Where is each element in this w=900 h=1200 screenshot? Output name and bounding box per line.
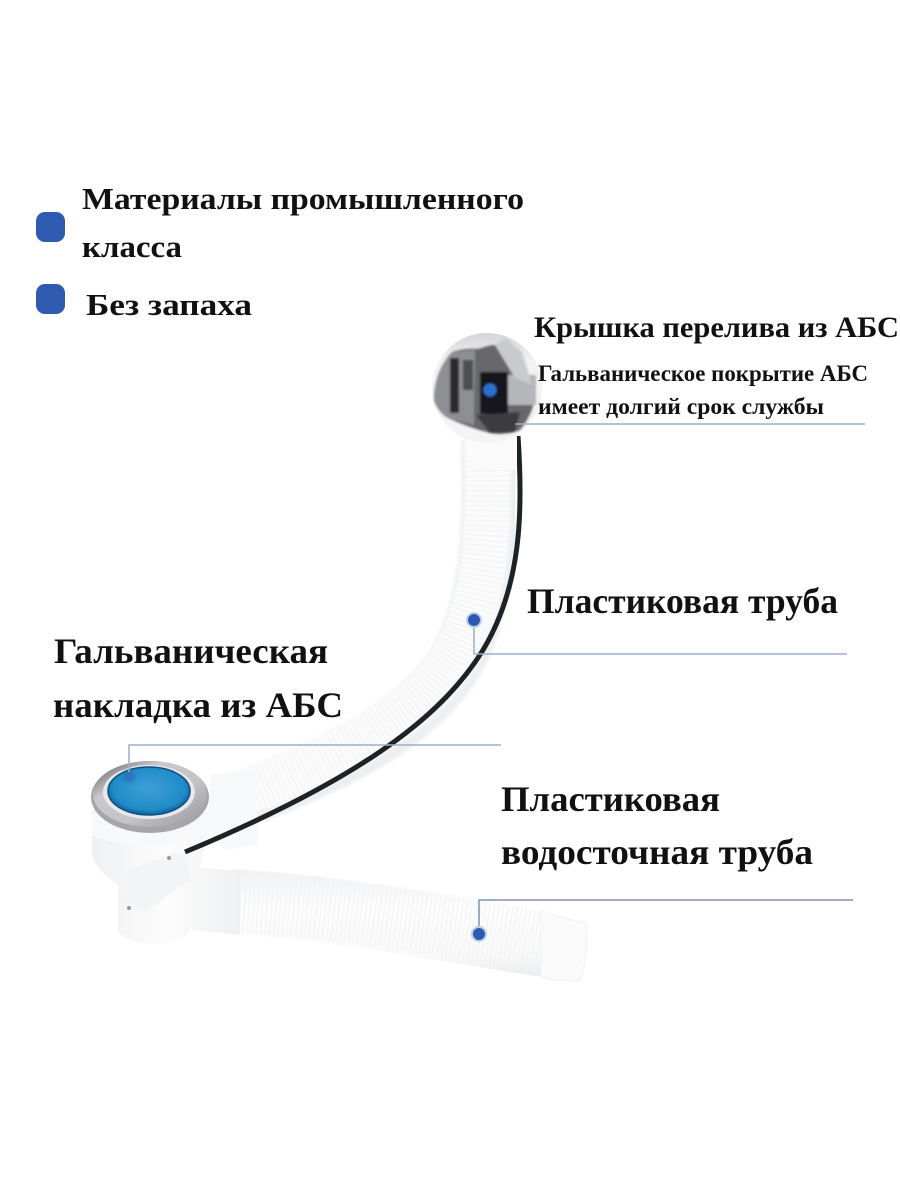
leader line: drain pipe: [479, 900, 853, 934]
text: galvanic trim line 1: Гальваническая: [54, 631, 328, 671]
text: drain pipe line 2: водосточная труба: [501, 832, 813, 872]
bullet list: features: [36, 181, 524, 322]
product: chrome overflow cap: [432, 333, 542, 470]
text: overflow cap description line 1: Гальваническое покрытие АБС: [538, 361, 868, 386]
leader line: overflow cap: [515, 423, 865, 425]
callout: plastic pipe: [467, 581, 847, 654]
product: upper overflow pipe: [230, 440, 490, 803]
text: overflow cap description line 2: имеет долгий срок службы: [538, 394, 824, 419]
product: lower drain pipe: [232, 869, 587, 981]
callout: galvanic ABS trim: [53, 631, 501, 772]
product: chrome drain cap in blue: [91, 761, 209, 833]
callout: overflow cap: [515, 311, 899, 424]
text: overflow cap heading: Крышка перелива из АБС: [534, 311, 899, 344]
dot marker: plastic pipe: [467, 613, 481, 627]
product: drain body: [92, 770, 258, 944]
leader line: plastic pipe: [474, 620, 847, 654]
text: plastic pipe: Пластиковая труба: [527, 581, 838, 621]
leader line: galvanic trim: [129, 745, 501, 772]
bullet icon: odorless: [36, 284, 65, 314]
text: industrial materials line 2: класса: [82, 229, 183, 264]
text: galvanic trim line 2: накладка из АБС: [53, 685, 343, 725]
callout: plastic drain pipe: [472, 779, 853, 941]
dot marker: drain pipe: [472, 927, 486, 941]
text: odorless: Без запаха: [86, 287, 253, 322]
product: black cable: [185, 436, 520, 852]
bullet icon: industrial materials: [36, 212, 65, 242]
text: drain pipe line 1: Пластиковая: [501, 779, 720, 819]
text: industrial materials: Материалы промышленного: [82, 181, 524, 216]
